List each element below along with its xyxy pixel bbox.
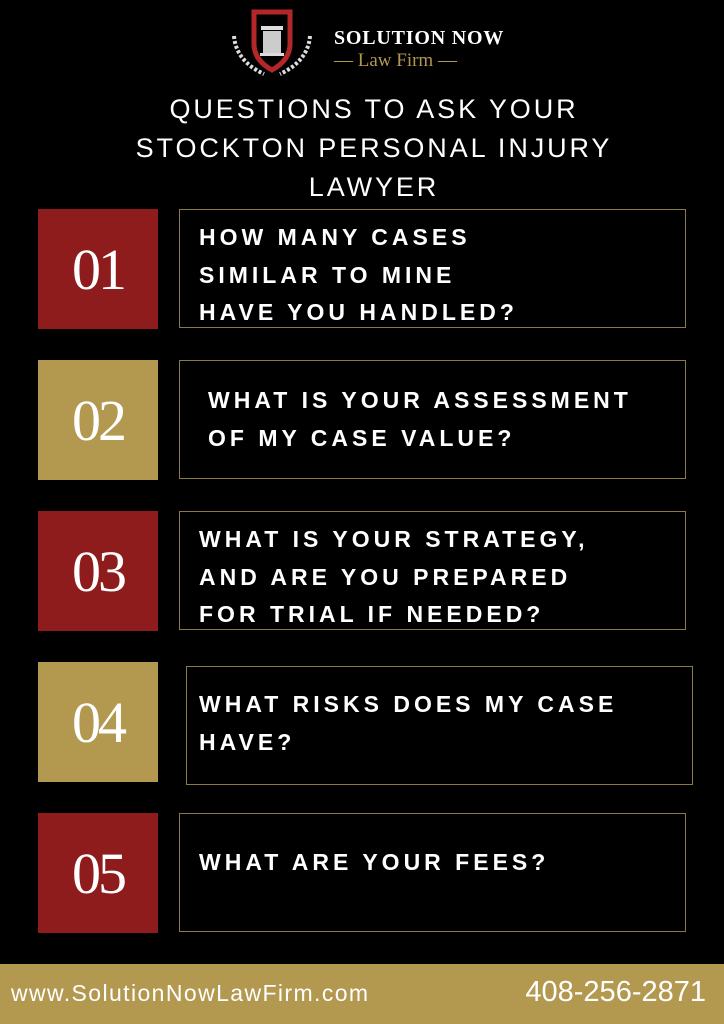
item 1: HOW MANY CASES (199, 224, 471, 250)
item 3: WHAT IS YOUR STRATEGY, (199, 526, 589, 552)
item 3 (38, 511, 686, 631)
item 4: WHAT RISKS DOES MY CASE (199, 691, 617, 717)
item 1: HAVE YOU HANDLED? (199, 299, 518, 325)
item 2: OF MY CASE VALUE? (208, 424, 515, 450)
item 1: SIMILAR TO MINE (199, 262, 455, 288)
item 4: HAVE? (199, 728, 295, 754)
title: STOCKTON PERSONAL INJURY (136, 133, 612, 163)
item 3: AND ARE YOU PREPARED (199, 564, 571, 590)
title: LAWYER (309, 172, 439, 202)
item 2 (38, 360, 686, 480)
item 1: 01 (72, 236, 124, 302)
item 3: FOR TRIAL IF NEEDED? (199, 601, 544, 627)
item 2: 02 (72, 388, 124, 452)
item 5: WHAT ARE YOUR FEES? (199, 849, 549, 875)
item 4 (38, 662, 693, 785)
title: QUESTIONS TO ASK YOUR (170, 94, 578, 124)
item 3: 03 (72, 538, 124, 604)
phone: 408-256-2871 (525, 976, 706, 1008)
item 5 (38, 813, 686, 933)
icon: shield with column and laurels (232, 10, 312, 76)
title (136, 94, 612, 202)
footer bar (0, 964, 724, 1024)
subtitle: — Law Firm — (334, 50, 457, 71)
logo (232, 10, 504, 76)
item 4: 04 (72, 690, 124, 754)
website: www.SolutionNowLawFirm.com (11, 980, 370, 1006)
item 2: WHAT IS YOUR ASSESSMENT (208, 387, 632, 413)
item 1 (38, 209, 686, 329)
item 5: 05 (72, 840, 124, 906)
brand name: SOLUTION NOW (334, 27, 504, 49)
